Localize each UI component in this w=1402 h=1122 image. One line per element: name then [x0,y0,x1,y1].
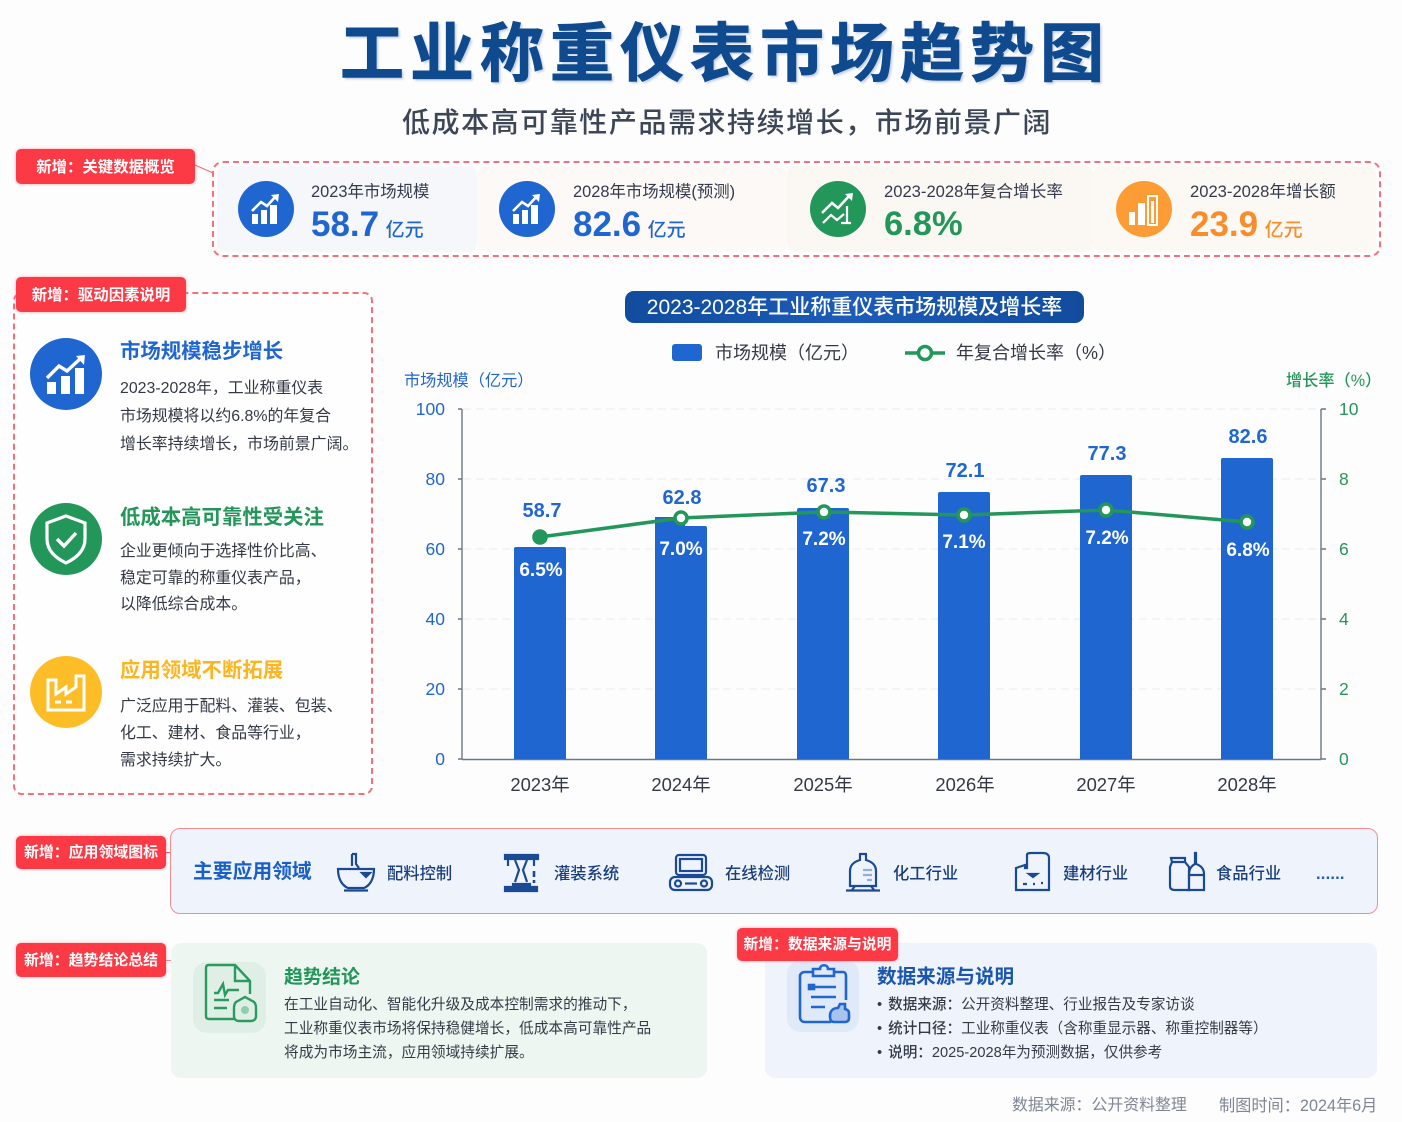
connector: conclusion tag [166,960,171,961]
icon: CAGR [810,181,866,237]
icon: increment [1116,181,1172,237]
tag: data sources [737,928,898,961]
text: application expansion: 需求持续扩大。 [120,752,231,769]
growth rate labels: 7.0% [659,539,703,560]
card background: increment [1093,166,1376,252]
tag: conclusion: 新增：趋势结论总结 [24,953,158,969]
text: conclusion: 将成为市场主流，应用领域持续扩展。 [284,1045,534,1061]
bar value labels: 62.8 [663,487,701,509]
heading: reliability: 低成本高可靠性受关注 [120,507,324,529]
legend: bar swatch [672,344,702,361]
icon: steady growth [30,338,102,410]
right axis: 6 [1339,539,1349,559]
label: increment: 2023-2028年增长额 [1190,182,1336,201]
card background: 2028 [477,166,787,252]
axis title: right: 增长率（%） [1286,372,1381,390]
icon: reliability shield [30,503,102,575]
ellipsis: ...... [1316,865,1345,883]
chart heading [625,291,1084,323]
value: 6.8%: 6.8% [884,205,963,243]
text: conclusion: 在工业自动化、智能化升级及成本控制需求的推动下， [284,997,637,1013]
left axis [416,399,462,769]
legend: line label: 年复合增长率（%） [956,343,1116,363]
growth rate labels: 7.1% [942,532,986,553]
icon: factory [30,656,102,728]
label: filling: 灌装系统 [554,865,619,883]
bars [514,458,1273,759]
footer: date: 制图时间：2024年6月 [1219,1097,1377,1115]
icon: online inspection [668,854,714,892]
text: conclusion: 工业称重仪表市场将保持稳健增长，低成本高可靠性产品 [284,1021,651,1037]
growth line [540,510,1247,537]
axis title: left: 市场规模（亿元） [404,372,534,390]
right axis: 2 [1339,679,1349,699]
tag: data sources: 新增：数据来源与说明 [744,937,891,953]
item: source: • 数据来源：公开资料整理、行业报告及专家访谈 [877,997,1195,1013]
right axis: 0 [1339,749,1349,769]
bar value labels [523,426,1267,522]
panel: applications [170,828,1378,914]
card background: 2023 [217,166,477,252]
line markers [534,504,1253,543]
chart heading: 2023-2028年工业称重仪表市场规模及增长率 [647,296,1062,319]
heading: data sources: 数据来源与说明 [877,966,1014,988]
value: 58.7: 58.7 亿元 [311,205,424,244]
icon: 2023 market size [238,181,294,237]
left axis: 40 [426,609,445,629]
subtitle: 低成本高可靠性产品需求持续增长，市场前景广阔 [402,107,1052,138]
text: reliability: 以降低综合成本。 [120,596,247,613]
x axis [462,760,1321,795]
x axis: 2026年 [935,774,995,795]
x axis: 2027年 [1076,774,1136,795]
text: application expansion: 广泛应用于配料、灌装、包装、 [120,698,342,715]
left axis: 0 [435,749,445,769]
tag: drivers: 新增：驱动因素说明 [32,287,170,304]
text: steady growth: 增长率持续增长，市场前景广阔。 [120,436,358,453]
card background: CAGR [787,166,1093,252]
heading: application expansion: 应用领域不断拓展 [120,660,283,682]
label: food: 食品行业 [1216,865,1281,883]
growth rate labels: 6.8% [1226,540,1270,561]
icon: conclusion document [193,962,266,1033]
right axis: 4 [1339,609,1349,629]
label: inspection: 在线检测 [725,865,790,883]
text: application expansion: 化工、建材、食品等行业， [120,725,311,742]
tag: drivers [16,277,186,312]
tag: key data: 新增：关键数据概览 [36,159,175,176]
left axis: 100 [416,399,445,419]
x axis: 2023年 [510,774,570,795]
right axis [1321,399,1359,769]
item: scope: • 统计口径：工业称重仪表（含称重显示器、称重控制器等） [877,1021,1268,1037]
combo chart: market size bars and growth rate line [416,399,1359,795]
tag: key data [16,149,195,184]
left axis: 60 [426,539,445,559]
title: 工业称重仪表市场趋势图 [340,18,1110,90]
bar value labels: 67.3 [807,475,845,497]
text: steady growth: 市场规模将以约6.8%的年复合 [120,408,331,425]
panel: conclusion [171,943,707,1078]
x axis: 2024年 [651,774,711,795]
legend: bar label: 市场规模（亿元） [715,343,859,363]
text: reliability: 企业更倾向于选择性价比高、 [120,543,327,560]
left axis: 80 [426,469,445,489]
text: conclusion [284,996,651,1061]
growth rate labels: 7.2% [1085,528,1129,549]
item: note: • 说明：2025-2028年为预测数据，仅供参考 [877,1045,1162,1061]
text: application expansion [120,697,342,769]
connector: application tag [166,852,171,853]
panel: data sources [765,943,1377,1078]
x axis: 2025年 [793,774,853,795]
text: steady growth: 2023-2028年，工业称重仪表 [120,380,323,397]
bar value labels: 77.3 [1088,443,1126,465]
value: 23.9: 23.9 亿元 [1190,205,1303,244]
label: batching: 配料控制 [387,865,452,883]
bar value labels: 58.7 [523,500,561,522]
heading: applications: 主要应用领域 [193,861,312,883]
text: reliability: 稳定可靠的称重仪表产品， [120,570,311,586]
icon: batching bowl [336,852,376,892]
value: 82.6: 82.6 亿元 [573,205,686,244]
label: 2023 market size: 2023年市场规模 [311,183,429,201]
legend: line swatch [905,344,945,362]
label: 2028 market size: 2028年市场规模(预测) [573,183,735,201]
footer: source: 数据来源：公开资料整理 [1012,1097,1187,1114]
heading: steady growth: 市场规模稳步增长 [120,341,283,363]
icon: 2028 market size [499,181,555,237]
growth rate labels [519,528,1270,581]
growth rate labels: 7.2% [802,529,846,550]
text: reliability [120,542,327,613]
text: steady growth [120,379,358,453]
connector: key data tag [195,164,212,174]
bar value labels: 72.1 [946,460,984,482]
panel: key metrics [212,161,1381,257]
label: building materials: 建材行业 [1063,865,1128,883]
right axis: 10 [1339,399,1359,419]
tag: conclusion [16,943,166,977]
tag: applications: 新增：应用领域图标 [24,845,158,861]
panel: drivers [13,292,373,795]
label: chemical: 化工行业 [893,865,958,883]
growth rate labels: 6.5% [519,560,563,581]
tag: applications [16,836,166,869]
right axis: 8 [1339,469,1349,489]
chart legend [672,343,1116,363]
label: CAGR: 2023-2028年复合增长率 [884,182,1063,201]
icon: clipboard [787,961,859,1032]
icon: building materials [1014,852,1050,892]
icon: chemical tank [846,852,880,892]
list: data sources [877,996,1268,1061]
x axis: 2028年 [1217,774,1277,795]
heading: conclusion: 趋势结论 [284,967,360,988]
bar value labels: 82.6 [1229,426,1267,448]
icon: food bottles [1168,852,1206,892]
icon: filling system [504,854,540,892]
left axis: 20 [426,679,445,699]
